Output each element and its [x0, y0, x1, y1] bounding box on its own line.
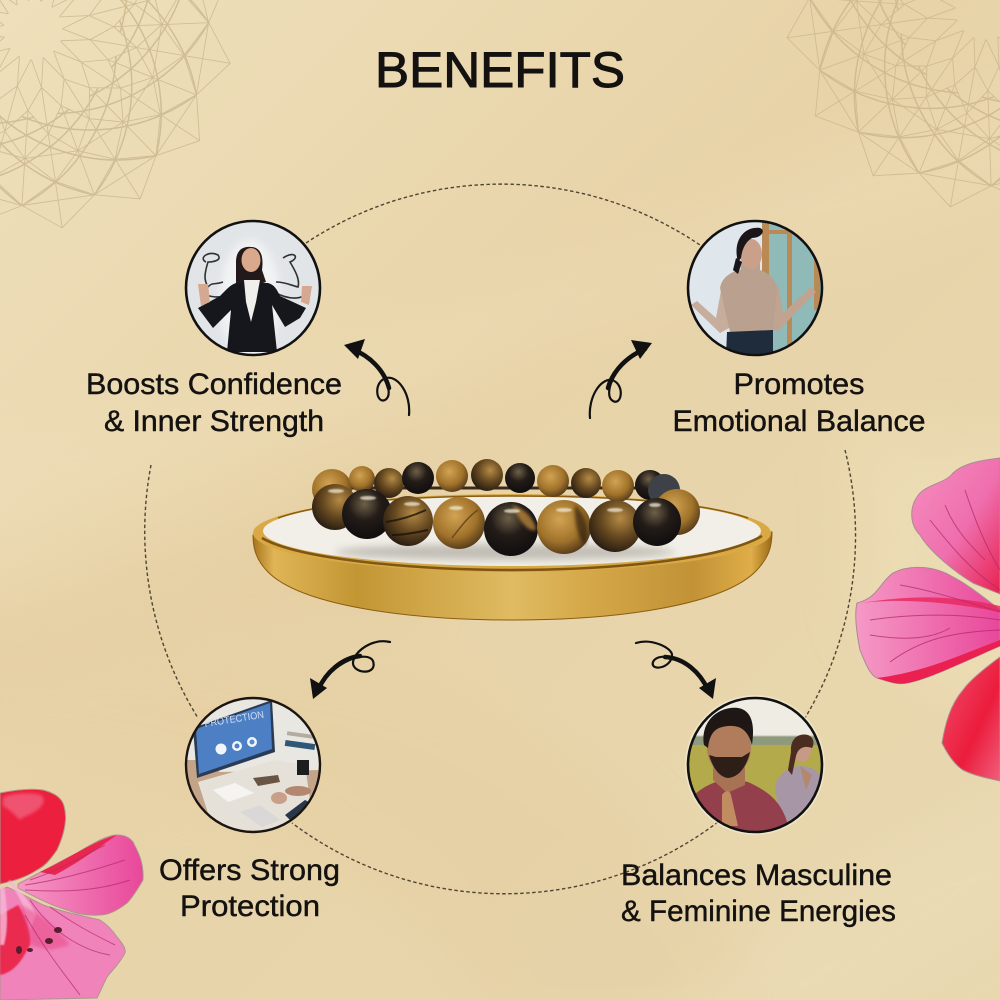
- flower: right: [856, 458, 1000, 781]
- blazer and arms: [198, 283, 306, 352]
- label: offers strong protection: [159, 854, 340, 923]
- arrow: to top-left: [344, 339, 409, 415]
- shelf items: [285, 740, 315, 750]
- petal: top red: [0, 789, 66, 884]
- decorative mandala: top left: [0, 0, 286, 283]
- petal: right: [18, 835, 143, 915]
- label: balances masculine feminine: Balances Masculine: [621, 859, 892, 892]
- label: promotes emotional balance: Promotes: [734, 368, 864, 401]
- arrow: to bottom-right: [636, 642, 716, 699]
- hands: [198, 284, 210, 306]
- jeans: [726, 330, 773, 356]
- drawn muscles: [203, 253, 304, 298]
- neck and face: [740, 262, 760, 270]
- hair: [733, 228, 763, 274]
- photo: meditating couple: [685, 695, 825, 835]
- woman: [775, 766, 820, 822]
- decorative mandala: top right: [755, 0, 1000, 244]
- dashed orbit circle: [145, 184, 856, 894]
- label: balances masculine feminine: & Feminine Energies: [621, 895, 896, 928]
- label: promotes emotional balance: Emotional Balance: [672, 405, 926, 438]
- hands: [722, 791, 738, 826]
- shirt: [244, 280, 260, 322]
- beard: [709, 752, 750, 778]
- screen icons: [216, 744, 226, 754]
- gold tray side: [253, 532, 772, 620]
- monitor: [193, 700, 275, 778]
- arrow: to bottom-left: [310, 641, 390, 699]
- screen title: PROTECTION: [204, 710, 265, 730]
- label: balances masculine feminine: [621, 859, 896, 928]
- product: tray with bracelet: [253, 459, 772, 620]
- desk: [187, 760, 318, 813]
- stamens: [16, 927, 62, 954]
- photo: confident woman: [185, 220, 321, 360]
- man neck and face: [713, 766, 745, 792]
- flower: bottom left: [0, 789, 143, 1000]
- torso: [720, 270, 777, 332]
- arms: [692, 291, 729, 333]
- photo: balanced woman: [688, 220, 825, 356]
- label: offers strong protection: Protection: [180, 890, 320, 923]
- white tray top: [263, 496, 761, 566]
- desk objects: [213, 783, 254, 802]
- label: boosts confidence: [86, 368, 342, 438]
- bead shadows: [335, 544, 675, 560]
- photo: protection desk: [185, 696, 321, 835]
- petal: middle: [856, 567, 1000, 684]
- face: [242, 248, 260, 272]
- title: BENEFITS: [375, 42, 625, 98]
- hair: [236, 246, 266, 283]
- petal: upper: [912, 458, 1000, 594]
- petal veins: [870, 490, 1000, 662]
- petal: middle red edge: [877, 640, 1000, 684]
- hands and sleeve: [285, 786, 311, 796]
- arrow: to top-right: [590, 340, 652, 418]
- bracelet: back beads: [312, 459, 680, 509]
- man shirt: [696, 782, 788, 831]
- label: offers strong protection: Offers Strong: [159, 854, 340, 887]
- bracelet: front beads: [312, 484, 700, 556]
- petal: lower red: [942, 657, 1000, 781]
- label: boosts confidence: Boosts Confidence: [86, 368, 342, 401]
- hair: [703, 708, 753, 748]
- petal: lower: [0, 887, 125, 1000]
- gold tray rim: [253, 494, 771, 572]
- label: promotes emotional balance: [672, 368, 926, 438]
- label: boosts confidence: & Inner Strength: [104, 405, 324, 438]
